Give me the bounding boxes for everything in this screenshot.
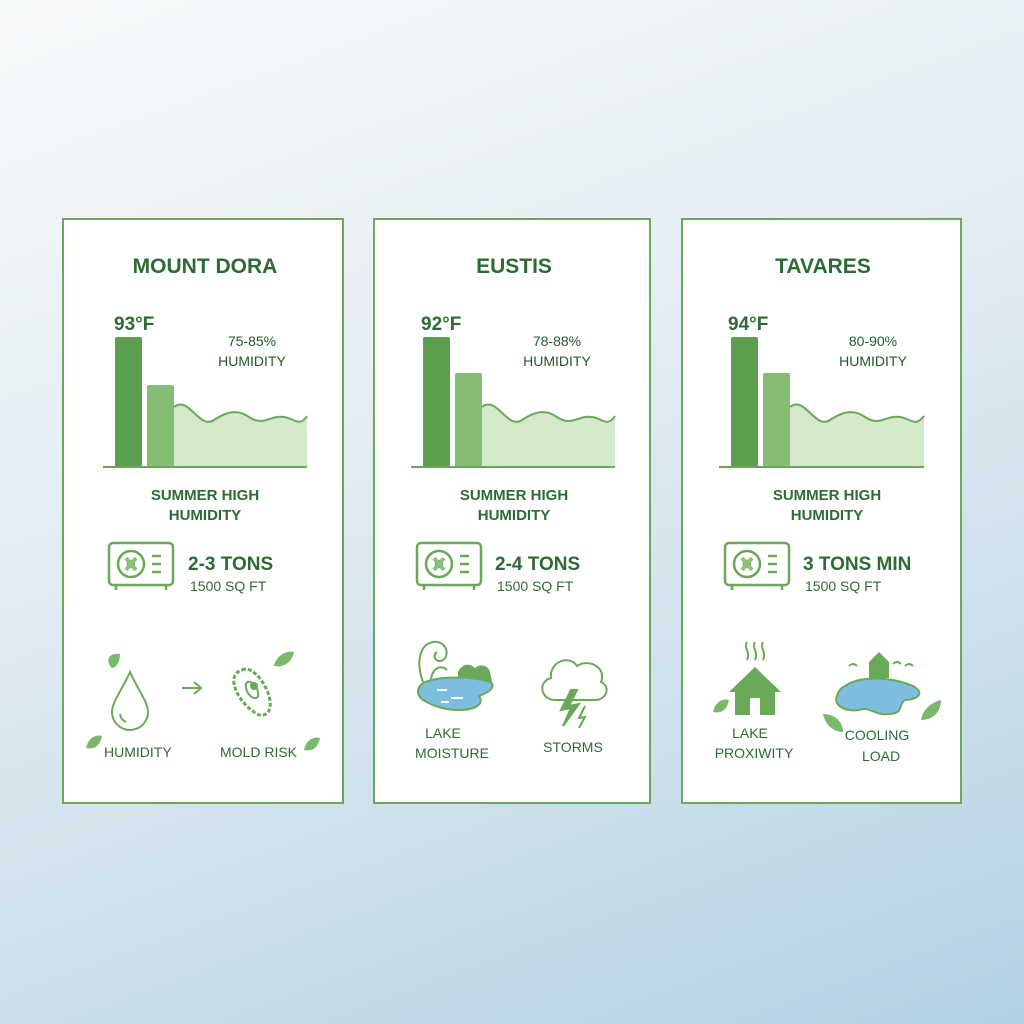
chart: temperature and humidity (411, 314, 615, 467)
chart: temperature and humidity: 80-90% (849, 333, 897, 349)
panel: Mount Dora: 1500 SQ FT (190, 578, 267, 594)
chart caption: SUMMER HIGH (773, 487, 881, 504)
labels: lake moisture and storms: STORMS (543, 739, 603, 755)
chart: temperature and humidity: HUMIDITY (523, 353, 591, 369)
icon: mold (234, 652, 294, 715)
chart: temperature and humidity: 78-88% (533, 333, 581, 349)
icon: lake with steam (418, 642, 492, 710)
chart: temperature and humidity: HUMIDITY (218, 353, 286, 369)
arrow (182, 682, 201, 694)
text: tonnage: 2-3 TONS (188, 554, 273, 575)
icon: AC unit (109, 543, 173, 590)
labels: humidity and mold risk (86, 736, 320, 760)
chart caption: SUMMER HIGH (460, 487, 568, 504)
labels: lake proximity and cooling load: LOAD (862, 748, 900, 764)
title: EUSTIS (476, 255, 552, 278)
icon: water drop (108, 654, 148, 730)
title: TAVARES (775, 255, 871, 278)
labels: lake proximity and cooling load (715, 725, 909, 764)
chart: temperature and humidity: HUMIDITY (839, 353, 907, 369)
title: MOUNT DORA (133, 255, 277, 278)
labels: humidity and mold risk: HUMIDITY (104, 744, 172, 760)
icon: storm cloud (542, 660, 607, 728)
panel: Eustis (373, 218, 651, 804)
chart: temperature and humidity (103, 314, 307, 467)
labels: lake moisture and storms (415, 725, 603, 761)
chart caption: SUMMER HIGH (151, 487, 259, 504)
icon: house with heat (713, 642, 781, 715)
panel: Mount Dora: HUMIDITY (169, 507, 241, 524)
labels: humidity and mold risk: MOLD RISK (220, 744, 298, 760)
panel: Tavares: HUMIDITY (791, 507, 863, 524)
panel: Mount Dora (62, 218, 344, 804)
panel: Tavares: 1500 SQ FT (805, 578, 882, 594)
labels: lake proximity and cooling load: COOLING (845, 727, 909, 743)
text: tonnage: 2-4 TONS (495, 554, 580, 575)
labels: lake moisture and storms: MOISTURE (415, 745, 489, 761)
chart: temperature and humidity: 75-85% (228, 333, 276, 349)
chart: temperature and humidity: 93°F (114, 314, 154, 335)
icon: AC unit (725, 543, 789, 590)
chart: temperature and humidity: 94°F (728, 314, 768, 335)
labels: lake proximity and cooling load: LAKE (732, 725, 768, 741)
icon: lake with house (823, 652, 941, 732)
text: tonnage: 3 TONS MIN (803, 554, 911, 575)
panel: Eustis: HUMIDITY (478, 507, 550, 524)
icon: AC unit (417, 543, 481, 590)
chart: temperature and humidity (719, 314, 924, 467)
labels: lake moisture and storms: LAKE (425, 725, 461, 741)
labels: lake proximity and cooling load: PROXIWITY (715, 745, 794, 761)
panel: Tavares (681, 218, 962, 804)
panel: Eustis: 1500 SQ FT (497, 578, 574, 594)
chart: temperature and humidity: 92°F (421, 314, 461, 335)
